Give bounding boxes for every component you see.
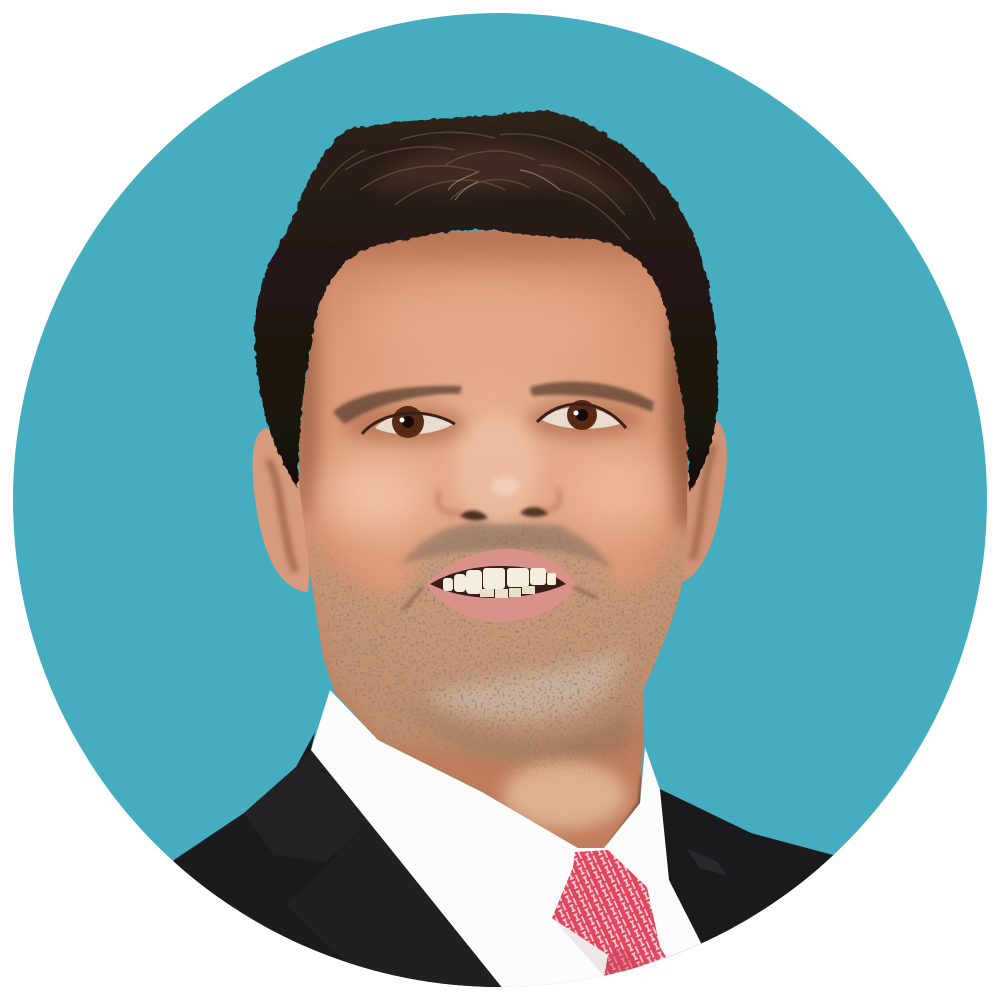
mouth opening — [430, 566, 566, 598]
lips — [426, 549, 578, 622]
neck crease — [610, 775, 643, 846]
person — [150, 110, 860, 1000]
left eyebrow — [333, 386, 462, 424]
nose — [438, 415, 560, 525]
moustache — [400, 522, 613, 570]
smile lines — [403, 587, 597, 610]
shirt — [311, 690, 720, 990]
right eye — [537, 400, 626, 430]
neck light — [503, 761, 627, 829]
suit jacket left — [174, 732, 502, 987]
suit jacket right — [650, 789, 833, 964]
face and neck — [292, 214, 702, 848]
forehead shading — [345, 230, 640, 274]
stubble base — [300, 520, 690, 760]
grey chin beard — [425, 650, 625, 720]
right eyebrow — [530, 382, 654, 412]
chin dark band — [424, 707, 635, 764]
teeth — [443, 568, 556, 598]
mouth — [403, 549, 597, 622]
tie — [552, 850, 666, 977]
lower stubble speckle — [298, 500, 690, 770]
left eye — [362, 406, 455, 438]
ears — [253, 418, 727, 592]
hair highlights — [378, 140, 624, 200]
cheeks — [325, 457, 425, 533]
hair — [254, 110, 718, 492]
eye sockets — [343, 405, 467, 445]
